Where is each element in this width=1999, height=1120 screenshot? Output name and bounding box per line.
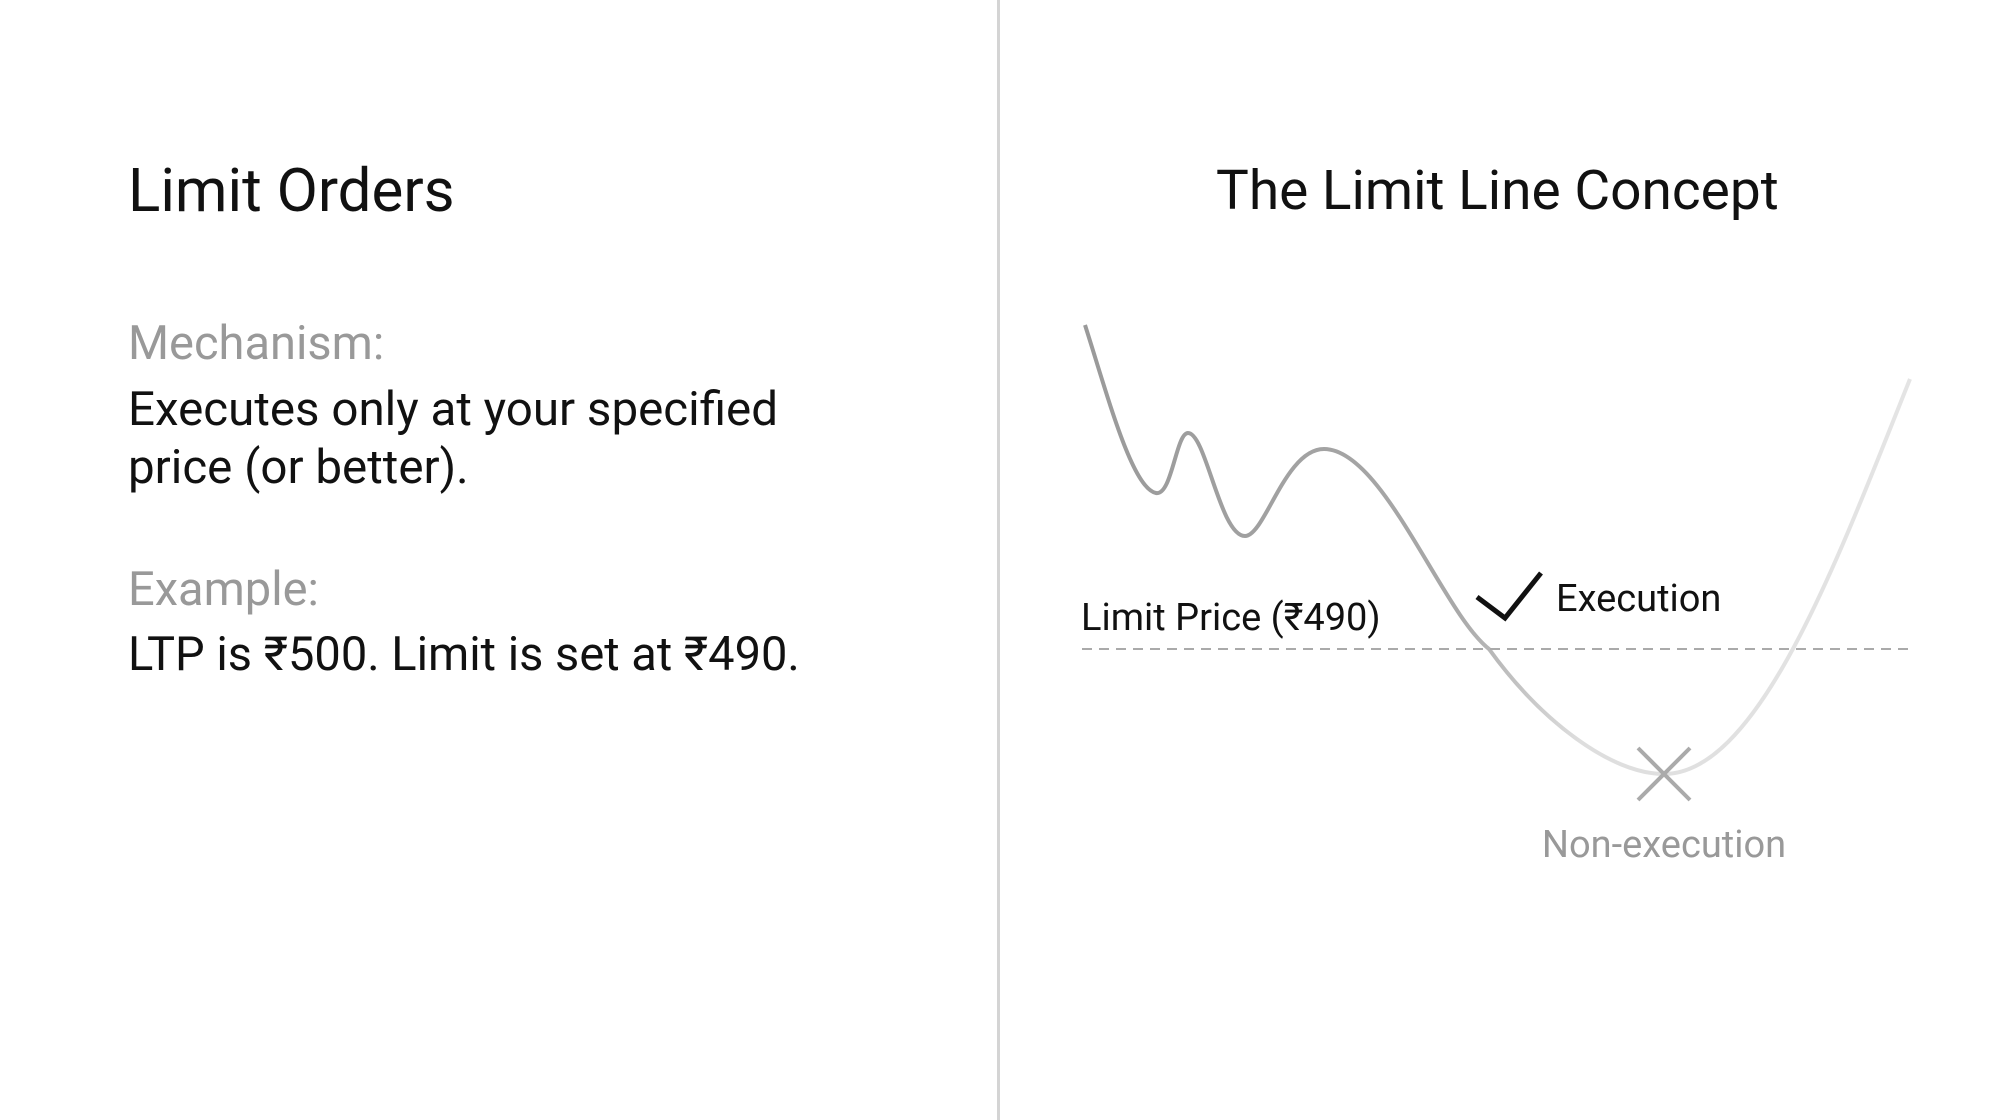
dashed limit line — [1082, 648, 1910, 650]
label: limit price: Limit Price (₹490) — [1081, 596, 1381, 640]
text: mechanism body: Executes only at your specified — [128, 381, 778, 437]
label: Example: Example: — [128, 562, 319, 617]
icon: checkmark — [1477, 573, 1541, 618]
icon: x mark — [1638, 748, 1690, 800]
label: non-execution: Non-execution — [1542, 823, 1786, 867]
title: The Limit Line Concept: The Limit Line Concept — [1216, 159, 1779, 223]
text: example body: LTP is ₹500. Limit is set at ₹490. — [128, 627, 800, 682]
text: mechanism body — [128, 381, 778, 495]
label: execution: Execution — [1556, 577, 1721, 621]
divider — [997, 0, 1000, 1120]
title: Limit Orders: Limit Orders — [128, 155, 455, 226]
label: Mechanism: Mechanism: — [128, 316, 384, 371]
text: mechanism body: price (or better). — [128, 439, 469, 495]
panel: limit orders text — [128, 155, 800, 682]
price curve — [1085, 325, 1910, 774]
